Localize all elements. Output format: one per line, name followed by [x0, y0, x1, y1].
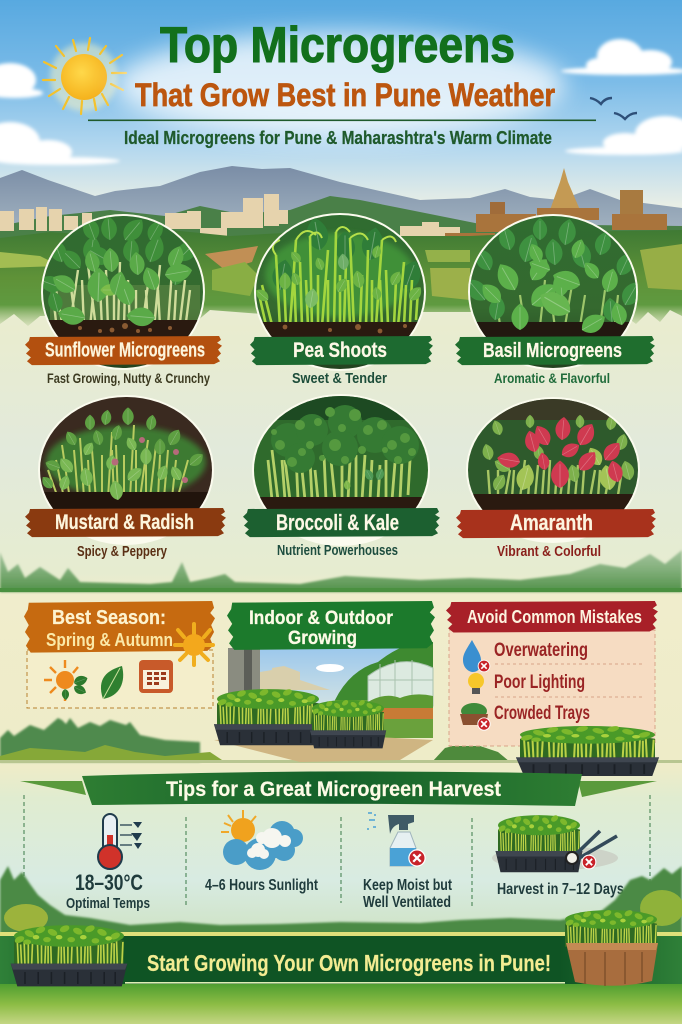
sun icon [43, 38, 126, 114]
text: well ventilated: Well Ventilated [363, 894, 451, 911]
banner: mustard [25, 508, 226, 537]
card: pea shoots [250, 212, 433, 387]
photo: sunflower [37, 212, 210, 372]
treeline beside panels [0, 718, 682, 763]
dashed box [27, 650, 213, 708]
banner: pea shoots [250, 336, 433, 365]
icon: tray and scissors [492, 814, 618, 872]
landscape: mountains, city and hills [0, 166, 682, 326]
icon: sun on banner [175, 624, 213, 665]
banner: broccoli [243, 508, 440, 537]
text: keep moist: Keep Moist but [363, 877, 453, 894]
title line 2: That Grow Best in Pune Weather [135, 77, 555, 113]
label: mustard: Mustard & Radish [55, 511, 194, 534]
text: crowded trays: Crowded Trays [494, 703, 590, 724]
card: mustard and radish [25, 394, 226, 560]
label: broccoli: Broccoli & Kale [276, 510, 399, 535]
banner: avoid mistakes [446, 601, 658, 632]
panel: avoid common mistakes [446, 601, 659, 776]
tip: harvest [492, 814, 624, 898]
photo: broccoli [250, 394, 434, 546]
text: poor lighting: Poor Lighting [494, 672, 585, 693]
icon: light bulb [468, 673, 484, 694]
divider rule under title [88, 120, 596, 121]
birds [590, 98, 637, 119]
banner: tips heading [20, 771, 657, 806]
icon: calendar [139, 660, 173, 693]
photo: mustard [36, 394, 216, 545]
banner: indoor outdoor [227, 601, 435, 650]
footer grass [0, 984, 682, 1024]
label: basil: Basil Microgreens [483, 340, 622, 362]
heading: avoid: Avoid Common Mistakes [467, 607, 642, 627]
temple and fort [445, 168, 667, 247]
tip: temperature [66, 814, 150, 912]
sky clouds [0, 39, 682, 165]
icon: sun and clouds [221, 810, 303, 870]
banner: call to action [0, 932, 682, 984]
icon: thermometer [98, 814, 142, 869]
photo: amaranth [466, 396, 640, 543]
text: overwatering: Overwatering [494, 640, 588, 661]
label: pea shoots: Pea Shoots [293, 339, 387, 362]
column dividers [24, 795, 650, 909]
caption: temperature: Optimal Temps [66, 895, 150, 912]
mountains [0, 166, 682, 240]
label: amaranth: Amaranth [510, 510, 593, 535]
banner: basil [455, 336, 655, 365]
icon: sun and leaves [44, 660, 89, 701]
card: basil microgreens [455, 212, 655, 386]
card: broccoli and kale [243, 394, 440, 559]
icon: crowded tray [460, 703, 490, 730]
pink box [449, 630, 655, 746]
caption: sunflower: Fast Growing, Nutty & Crunchy [47, 370, 210, 386]
tray bottom left [11, 924, 127, 986]
tip: moisture [363, 813, 453, 911]
title: Top Microgreens [160, 17, 515, 73]
heading: growing: Growing [288, 628, 357, 649]
value: temperature: 18–30°C [75, 870, 143, 895]
caption: broccoli: Nutrient Powerhouses [277, 543, 398, 559]
panel: indoor and outdoor growing [214, 601, 435, 762]
tray foreground [516, 725, 659, 776]
text: harvest: Harvest in 7–12 Days [497, 881, 624, 898]
panel: best season [24, 601, 215, 708]
text: sunlight: 4–6 Hours Sunlight [205, 877, 319, 894]
icon: leaf [101, 666, 123, 699]
icon: spray bottle [367, 813, 425, 866]
card: sunflower microgreens [25, 212, 222, 386]
caption: basil: Aromatic & Flavorful [494, 370, 610, 386]
photo: pea shoots [252, 212, 428, 372]
banner: best season [24, 601, 215, 653]
label: sunflower: Sunflower Microgreens [45, 340, 205, 362]
heading: indoor and outdoor: Indoor & Outdoor [249, 608, 394, 629]
title glow [115, 33, 565, 137]
planter bottom right [565, 909, 658, 986]
treeline strip between sections [0, 550, 682, 592]
forest edges around tips section [0, 866, 682, 936]
card: amaranth [456, 396, 656, 560]
tip: sunlight [205, 810, 319, 894]
heading: best season: Best Season: [52, 607, 166, 629]
distant forest [0, 196, 682, 262]
banner: sunflower [25, 336, 222, 365]
scene: garden view [214, 642, 433, 762]
icon: water drop [463, 640, 490, 672]
tray small [310, 699, 386, 748]
banner: amaranth [456, 509, 656, 538]
left buildings [0, 194, 460, 240]
caption: mustard: Spicy & Peppery [77, 544, 167, 560]
heading: spring and autumn: Spring & Autumn [46, 630, 173, 650]
caption: pea shoots: Sweet & Tender [292, 370, 387, 387]
green hills [0, 230, 682, 326]
text: call to action: Start Growing Your Own Microgreens in Pune! [147, 950, 551, 976]
heading: tips: Tips for a Great Microgreen Harvest [166, 778, 501, 801]
caption: amaranth: Vibrant & Colorful [497, 544, 601, 560]
tray large [214, 688, 322, 745]
subtitle: Ideal Microgreens for Pune & Maharashtra's Warm Climate [124, 128, 552, 148]
photo: basil [461, 212, 646, 372]
